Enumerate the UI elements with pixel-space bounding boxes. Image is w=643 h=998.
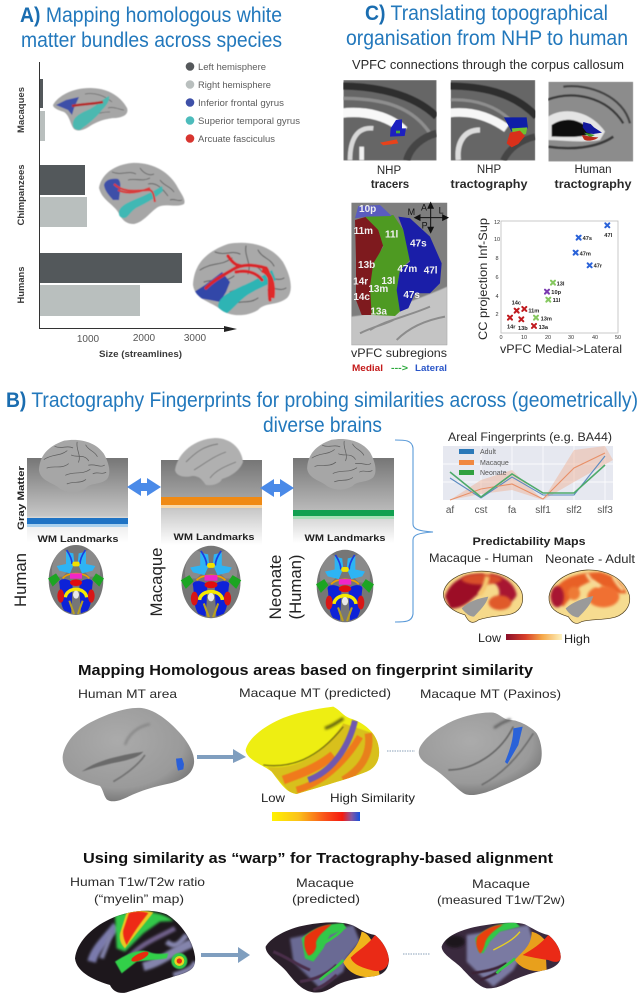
caption: NHP tractography: tractography [450,179,528,191]
predictability heading: Predictability Maps [472,536,586,548]
scatter points: 13b [518,326,528,332]
section heading: Mapping Homologous areas based on fingerprint similarity [78,663,533,679]
vPFC subregions map: A [421,203,427,213]
scatter plot: CC projection vs medial-lateral [476,218,622,356]
map labels: Neonate - Adult [545,554,636,566]
tract labels: slf2 [566,505,582,516]
brain captions: Human MT area [78,687,177,701]
similarity scale [261,791,415,821]
heat map brain: macaque-human [443,571,523,622]
vPFC subregions map: 47s [403,290,420,301]
caption: NHP tractography [450,164,528,191]
captions: Macaque [296,876,354,890]
scatter points: 13l [557,281,565,287]
arrow [201,947,250,963]
WM landmarks labels [38,532,386,545]
scatter tick labels: 4 [495,294,499,300]
panel B: tractography fingerprints [6,389,638,646]
inflated brain: macaque MT predicted [246,707,383,797]
vPFC subregions map [351,203,448,345]
scatter points: 11m [528,309,539,315]
vPFC subregions map: 10p [359,204,376,215]
brain captions [78,686,561,701]
gradient block: neonate [293,439,394,543]
subheading: VPFC connections through the corpus callosum [352,58,624,72]
vPFC subregions map: 47l [424,265,438,276]
inflated brain: macaque MT Paxinos [419,712,542,795]
heading C: organisation from NHP to human [346,27,628,50]
scatter points: 14c [512,300,521,306]
tract labels: slf1 [535,505,551,516]
heading A [20,4,282,52]
vPFC subregions map: 11l [385,229,399,240]
panel C: translating topographical organisation [340,2,633,373]
heading C [346,2,628,50]
chart title: Areal Fingerprints (e.g. BA44) [448,432,612,444]
vPFC subregions map: 13a [370,307,387,318]
species labels: Neonate [266,554,285,620]
scatter points: 14r [507,324,516,330]
scatter tick labels: 40 [592,335,598,341]
chart legend: Adult [480,449,496,456]
myelin brain: macaque measured [442,922,561,988]
caption: NHP tracers: NHP [377,165,401,177]
legend [186,62,300,145]
scatter tick labels: 0 [499,335,503,341]
scatter tick labels: 10 [521,335,527,341]
caption: NHP tracers: tracers [371,179,409,191]
chart legend: Neonate [480,470,507,477]
tract labels: af [446,505,454,516]
scatter tick labels: 2 [495,312,499,318]
vPFC subregions map: 13l [381,276,395,287]
species labels: Macaque [147,548,166,616]
panel A: white matter bundles across species [16,4,300,359]
caption: human tractography: Human [574,164,612,176]
heading C: C) Translating topographical [365,2,608,25]
axial atlas: neonate [316,550,374,622]
caption: vPFC subregions: Medial [352,363,383,373]
chart legend: Macaque [480,460,509,467]
myelin brain: macaque predicted [266,922,389,993]
bars macaques [40,79,45,141]
brain captions: Macaque MT (Paxinos) [420,687,561,701]
vPFC subregions map: 14c [353,292,370,303]
scatter points: 47s [583,236,592,242]
legend: Superior temporal gyrus [198,116,300,127]
chart legend [459,449,509,477]
gray matter label: Gray Matter [16,466,27,530]
similarity scale: High Similarity [330,791,415,805]
brain: chimpanzee [99,163,185,224]
caption: NHP tractography: NHP [477,164,501,176]
legend: Left hemisphere [198,62,266,73]
caption: vPFC subregions: Lateral [415,363,447,373]
macaque band [450,446,613,500]
captions: (“myelin” map) [94,892,184,906]
caption: vPFC subregions: vPFC subregions [351,346,447,360]
scatter points: 10p [551,290,562,296]
legend: Arcuate fasciculus [198,134,275,145]
section: mapping homologous areas [63,663,561,821]
tract labels: fa [508,505,517,516]
gradient block: human [27,440,128,543]
captions: Human T1w/T2w ratio [70,875,205,889]
scatter tick labels: 6 [495,275,499,281]
arrow: macaque to neonate [260,479,294,497]
heading A: matter bundles across species [21,29,282,52]
species labels: (Human) [286,554,305,620]
scatter points: 13a [539,325,549,331]
caption: vPFC subregions [351,346,447,373]
brace [395,440,433,622]
map labels: Macaque - Human [429,553,533,565]
scatter axis titles: vPFC Medial->Lateral [500,342,622,356]
x axis ticks and label: Size (streamlines) [99,349,182,359]
bars humans [40,253,182,316]
MRI: NHP tractography [447,80,537,161]
tract labels: slf3 [597,505,613,516]
axial atlas: human [48,545,104,615]
WM landmarks labels: WM Landmarks [38,534,119,545]
caption: human tractography: tractography [554,179,632,191]
chart axes [40,62,237,332]
bar chart: size in streamlines [16,62,237,359]
species labels: Human [11,553,30,607]
x axis ticks and label: 2000 [133,333,156,344]
vPFC subregions map: 13m [368,284,388,295]
dotted connector [387,750,415,752]
scatter points [507,223,613,332]
bars chimpanzees [40,165,87,227]
tract labels: cst [475,505,488,516]
scatter points: 47l [604,233,613,239]
arrow: human to macaque [127,478,161,496]
WM landmarks labels: WM Landmarks [174,532,254,543]
scatter tick labels: 30 [568,335,574,341]
heading B: diverse brains [263,414,382,437]
areal fingerprints chart [443,432,613,516]
dotted connector [403,953,430,955]
legend: Inferior frontal gyrus [198,98,284,109]
scatter points: 47r [594,263,603,269]
brain: macaque [53,88,127,130]
vPFC subregions map: M [408,207,415,217]
caption: vPFC subregions: ---> [391,363,408,373]
scatter tick labels: 50 [615,335,621,341]
inflated brain: human MT [63,708,194,801]
scatter tick labels: 10 [494,237,500,243]
brain captions: Macaque MT (predicted) [239,686,391,700]
scatter axis titles [476,218,622,356]
scatter points: 13m [541,317,552,323]
MRI: NHP tracers [340,80,437,161]
color scale: low to high: High [564,632,590,646]
x axis ticks and label: 1000 [77,334,100,345]
gradient block: macaque [161,438,262,545]
color scale: low to high [478,631,590,646]
scatter tick labels: 20 [545,335,551,341]
predictability maps [429,536,636,646]
vPFC subregions map: 11m [354,226,373,237]
scatter tick labels: 12 [494,220,500,226]
scatter points: 47m [580,251,591,257]
heading A: A) Mapping homologous white [20,4,282,27]
heat map brain: neonate-adult [549,570,630,623]
WM landmarks labels: WM Landmarks [304,533,386,544]
species axis labels: Macaques [16,87,27,133]
scatter tick labels [494,220,621,341]
species axis labels: Humans [16,266,27,304]
vPFC subregions map: 14r [353,277,368,288]
myelin brain: human [75,911,195,993]
scatter points: 11l [553,298,561,304]
color scale: low to high: Low [478,631,501,645]
map labels [429,553,636,566]
vPFC subregions map: L [439,205,444,215]
vPFC subregions map: P [422,221,428,231]
captions [70,875,565,907]
legend: Right hemisphere [198,80,271,91]
MRI: human tractography [547,82,633,162]
brain: human with arcuate fasciculus [193,243,291,315]
fingerprint lines [450,453,605,500]
axial atlas: macaque [181,546,241,618]
caption: NHP tracers [371,165,409,191]
scatter tick labels: 8 [495,256,499,262]
section: similarity as warp [70,851,565,993]
species labels [11,548,305,620]
heading B [6,389,638,437]
vPFC subregions map: 47s [410,239,427,250]
vPFC subregions map: 13b [358,260,375,271]
scatter axis titles: CC projection Inf-Sup [476,218,490,340]
tract labels [446,505,613,516]
section heading: Using similarity as “warp” for Tractography-based alignment [83,851,553,867]
arrow [197,749,246,763]
captions: (measured T1w/T2w) [437,893,565,907]
similarity scale: Low [261,791,285,805]
captions: (predicted) [292,892,360,906]
vPFC subregions map: 47m [397,264,417,275]
x axis ticks and label: 3000 [184,333,207,344]
caption: human tractography [554,164,632,191]
species axis labels: Chimpanzees [16,164,27,226]
x axis ticks and label [77,333,207,359]
species axis labels [16,87,27,304]
captions: Macaque [472,877,530,891]
